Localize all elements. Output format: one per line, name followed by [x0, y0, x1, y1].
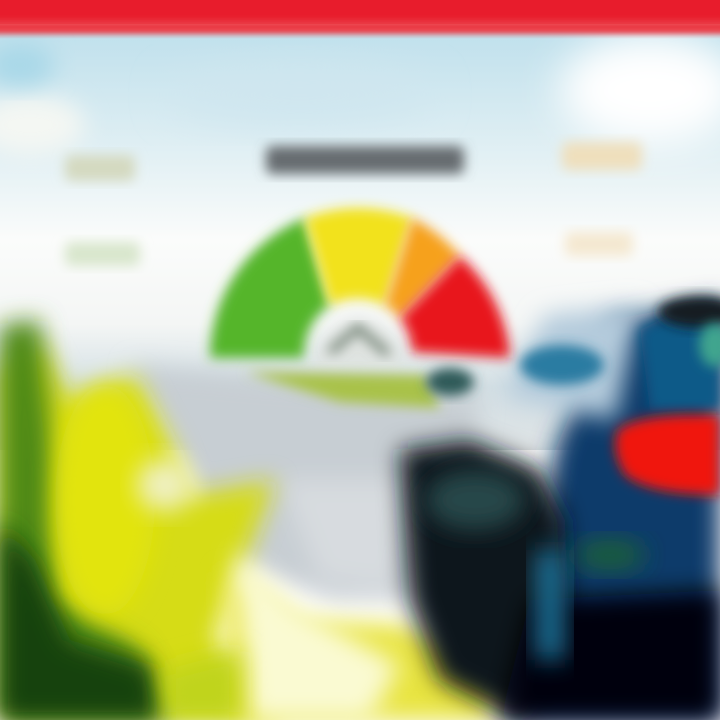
gauge green segment	[210, 218, 330, 358]
green strip below gauge	[245, 372, 440, 408]
gauge orange segment	[385, 218, 460, 318]
callout: top left	[65, 155, 135, 181]
dark patch beside gauge	[426, 368, 474, 396]
background sky	[0, 30, 720, 450]
callout: middle left	[65, 242, 140, 266]
gauge hub	[312, 318, 405, 366]
foliage: left plant and bottom highlights	[0, 320, 505, 720]
top banner	[0, 0, 720, 34]
callout: top right	[562, 142, 642, 170]
callout: middle right	[565, 232, 633, 256]
gauge yellow segment	[305, 208, 412, 305]
heading	[266, 146, 464, 174]
gauge red segment	[400, 256, 510, 358]
road	[130, 365, 480, 600]
gauge	[210, 208, 510, 366]
car: dark blue vehicle	[400, 296, 720, 720]
tail light	[615, 415, 720, 495]
